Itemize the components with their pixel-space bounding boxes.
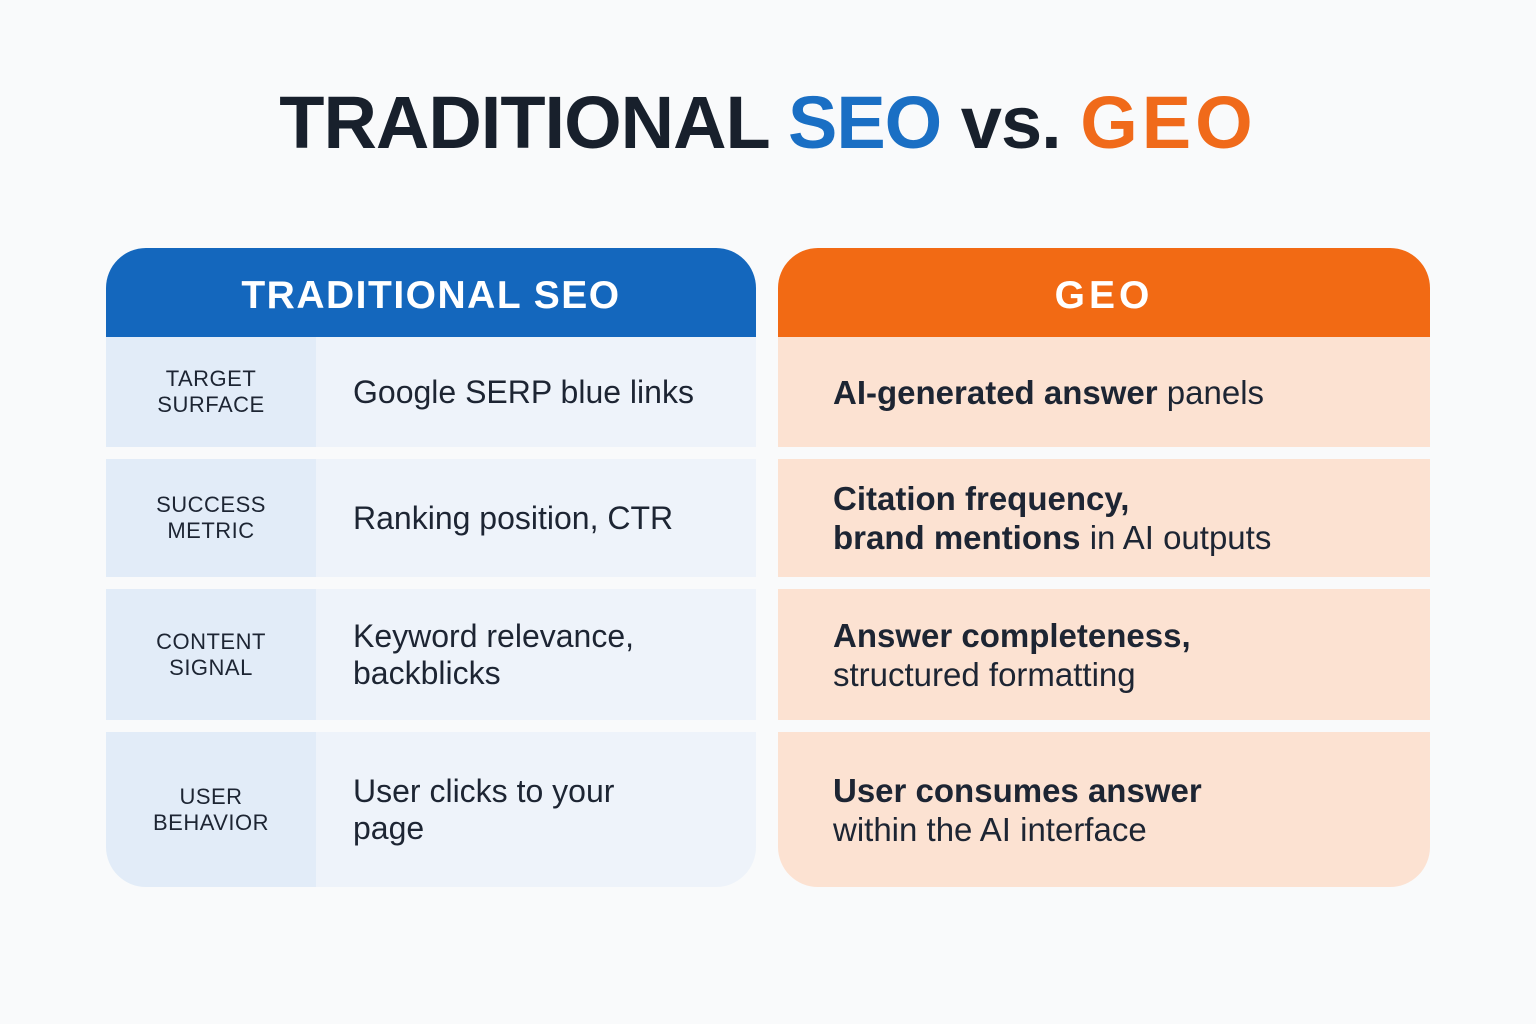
row: geo signal: Answer completeness, <box>833 616 1191 654</box>
title: TRADITIONAL SEO vs. GEO <box>279 81 1257 164</box>
row: user behavior: USER <box>179 784 243 808</box>
row: geo behavior <box>778 732 1430 887</box>
row: geo target: AI-generated answer panels <box>833 374 1264 410</box>
row: user behavior <box>106 732 756 887</box>
row: success metric: Ranking position, CTR <box>353 500 673 536</box>
panel: geo <box>778 248 1430 887</box>
row: content signal: CONTENT <box>156 628 266 654</box>
row: user behavior: BEHAVIOR <box>153 810 269 834</box>
row: success metric: METRIC <box>167 518 255 543</box>
header: traditional seo <box>106 248 756 337</box>
row: success metric: SUCCESS <box>156 492 266 517</box>
header: geo: GEO <box>1055 274 1153 317</box>
panel: traditional seo <box>106 248 756 887</box>
row: success metric <box>106 459 756 577</box>
row: content signal: backblicks <box>353 654 501 690</box>
row: target surface: SURFACE <box>157 392 265 417</box>
row: geo behavior: within the AI interface <box>833 810 1147 848</box>
row: geo target <box>778 337 1430 447</box>
row: geo signal <box>778 589 1430 720</box>
row: content signal <box>106 589 756 720</box>
row: geo behavior: User consumes answer <box>833 772 1202 808</box>
row: geo metric <box>778 459 1430 577</box>
header: traditional seo: TRADITIONAL SEO <box>241 274 621 317</box>
row: geo metric: brand mentions in AI outputs <box>833 519 1271 556</box>
row: geo signal: structured formatting <box>833 656 1136 692</box>
row: target surface: Google SERP blue links <box>353 374 694 410</box>
row: target surface <box>106 337 756 447</box>
row: user behavior: User clicks to your <box>353 772 614 808</box>
row: content signal: Keyword relevance, <box>353 618 634 654</box>
row: geo metric: Citation frequency, <box>833 480 1129 517</box>
header: geo <box>778 248 1430 337</box>
row: content signal: SIGNAL <box>169 654 253 680</box>
row: target surface: TARGET <box>166 366 256 391</box>
row: user behavior: page <box>353 810 424 846</box>
